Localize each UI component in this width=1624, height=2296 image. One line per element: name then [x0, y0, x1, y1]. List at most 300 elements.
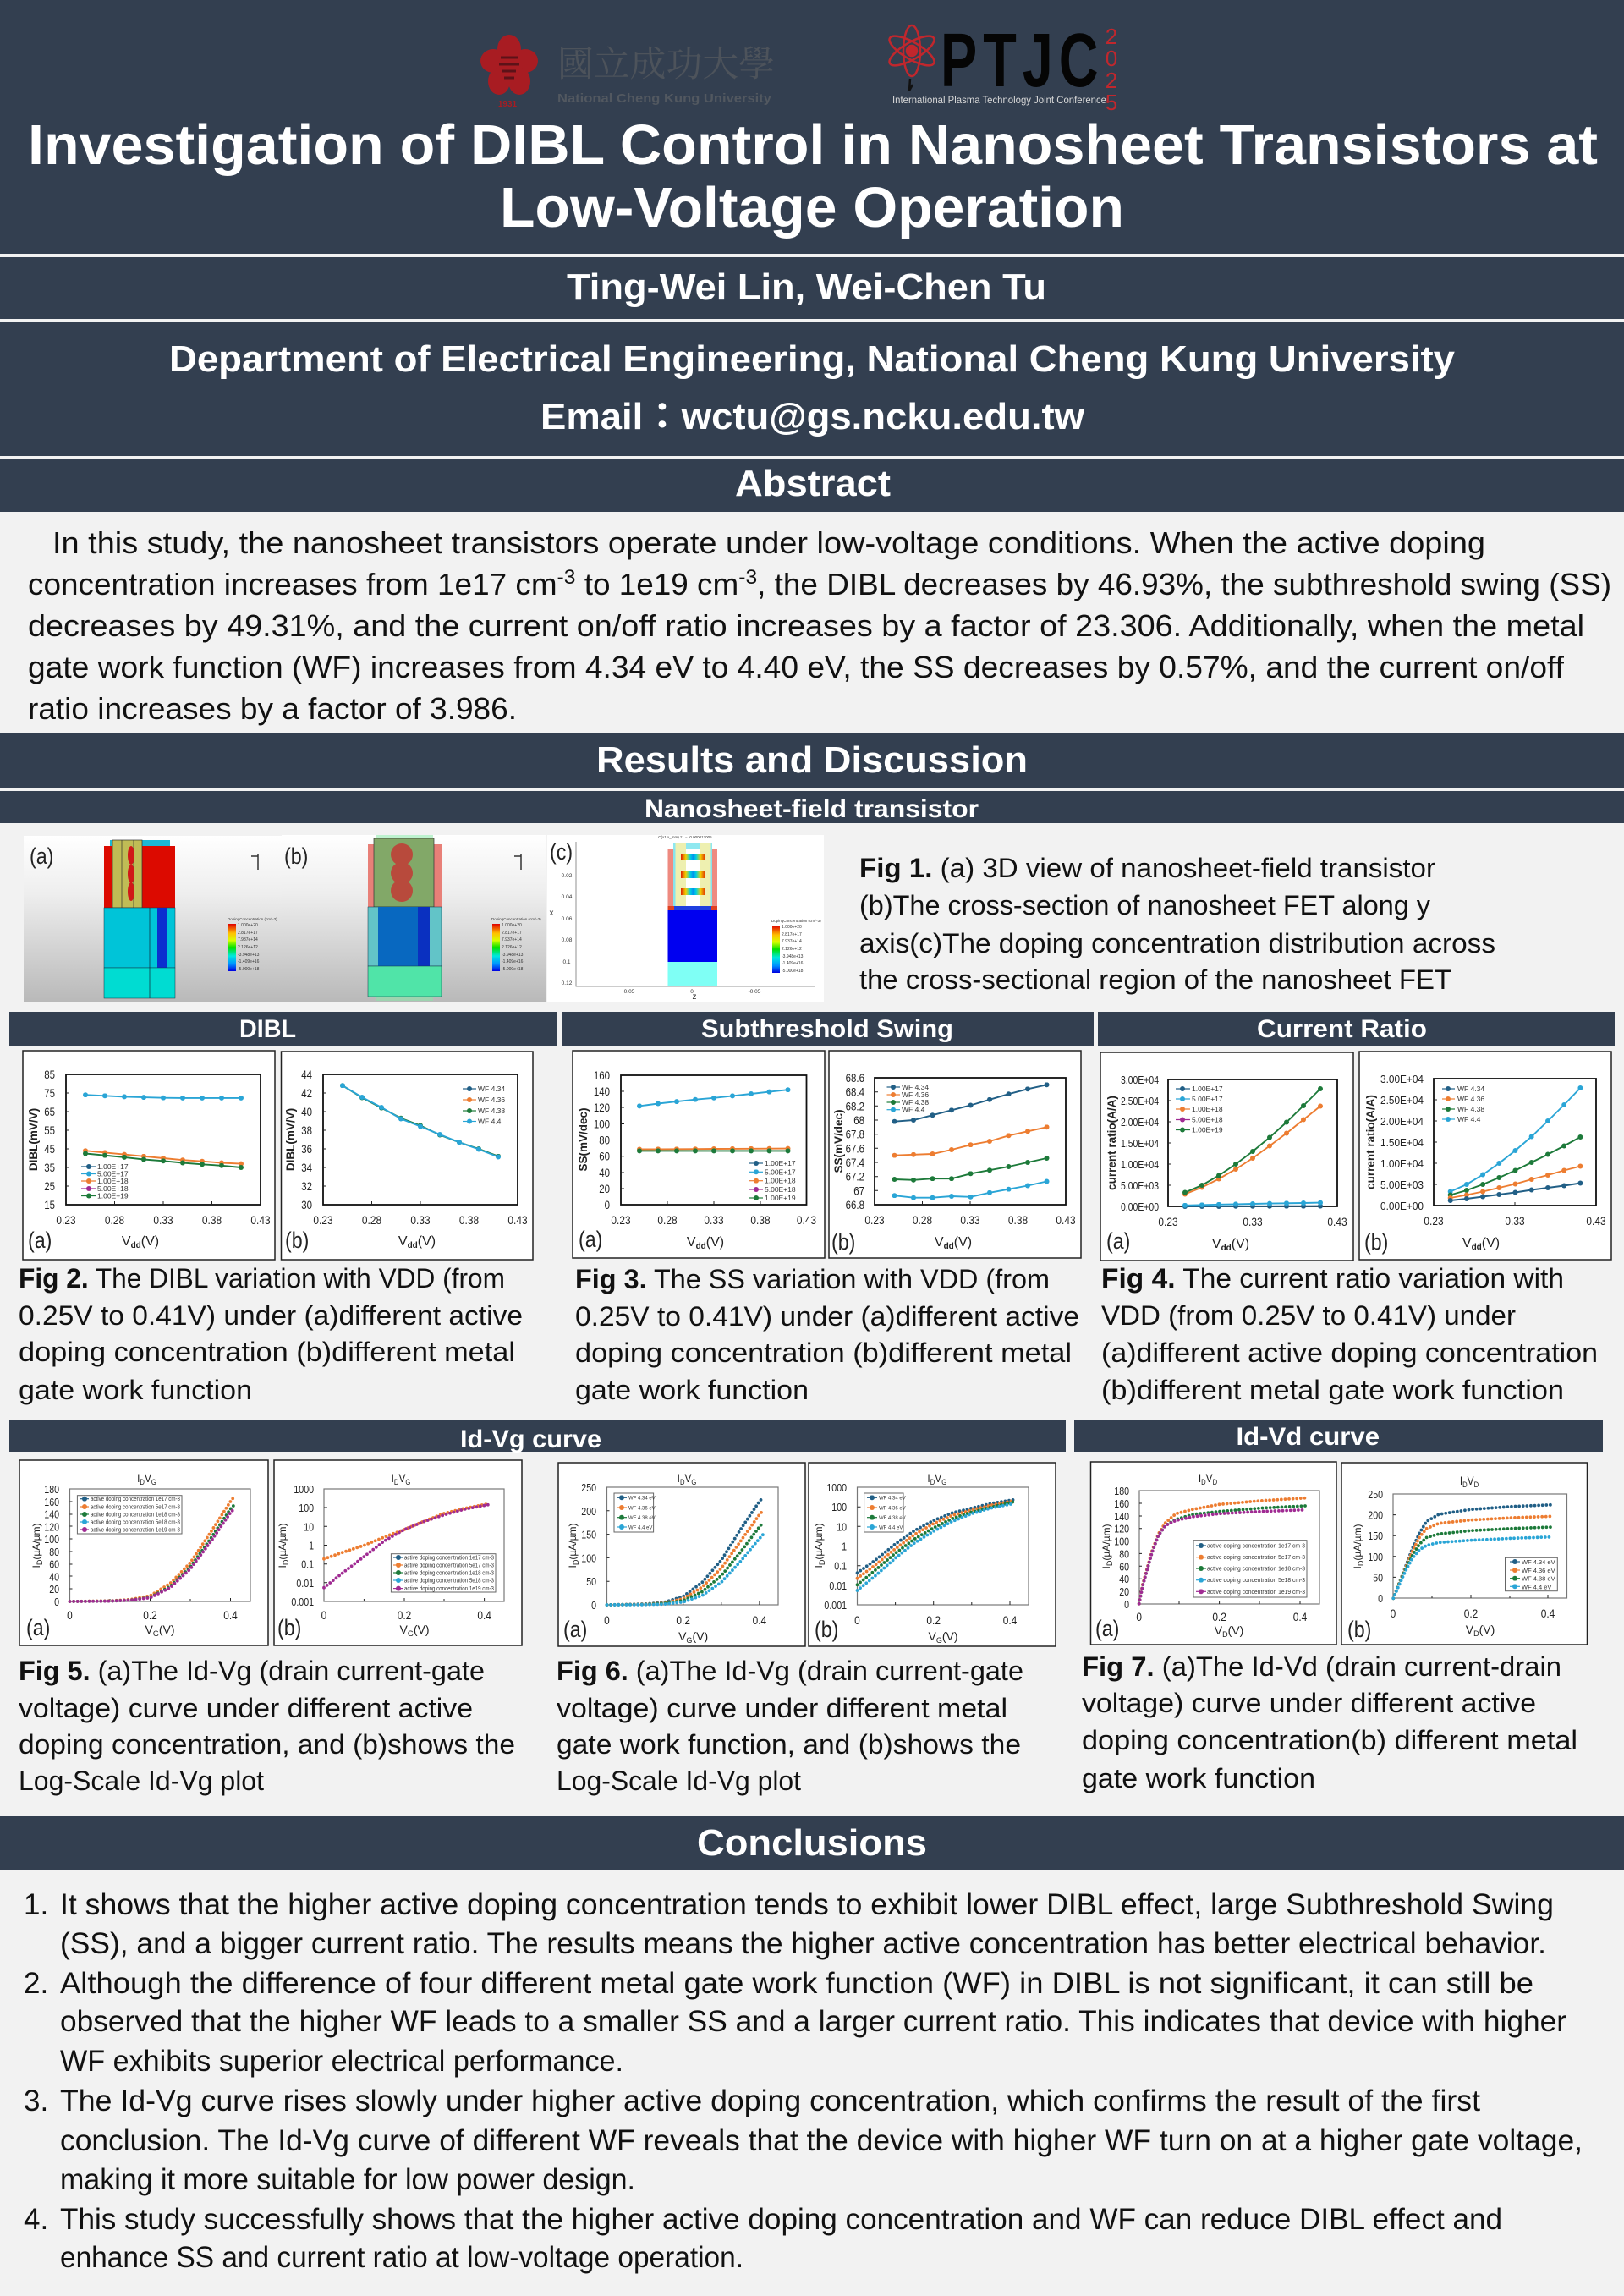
Fig 5 caption: Fig 5. (a)The Id-Vg (drain current-gate — [19, 1656, 485, 1686]
chart: Fig 7b Id-Vd, work function: (µA/µm) — [1352, 1524, 1363, 1561]
chart: Fig 7a Id-Vd, doping: (a) — [1095, 1616, 1119, 1641]
axis tick labels: 0.08 — [562, 937, 573, 943]
Fig 6 caption: Log-Scale Id-Vg plot — [557, 1766, 801, 1796]
chart: Fig 2b DIBL vs Vdd, work function: 36 — [301, 1142, 312, 1156]
chart: Fig 3a SS vs Vdd, doping: 100 — [594, 1117, 610, 1131]
chart: Fig 5a Id-Vg linear, doping: 0.2 — [143, 1608, 157, 1622]
chart: Fig 5b Id-Vg log, doping: G — [408, 1629, 414, 1638]
vertical year 2025: 5 — [1106, 90, 1117, 115]
chart: Fig 5a Id-Vg linear, doping: 60 — [49, 1558, 59, 1571]
results heading — [0, 733, 1624, 788]
Fig 4 caption — [1101, 1263, 1598, 1405]
chart: Fig 3b SS vs Vdd, work function: 67.2 — [846, 1170, 864, 1184]
axis tick labels: 0.1 — [562, 959, 571, 965]
chart: Fig 2b DIBL vs Vdd, work function: WF 4.4 — [478, 1117, 502, 1125]
chart: Fig 7a Id-Vd, doping: active doping concentration 1e17 cm-3 — [1207, 1541, 1305, 1550]
chart: Fig 7a Id-Vd, doping: V — [1206, 1471, 1213, 1485]
chart: Fig 3a SS vs Vdd, doping: 120 — [594, 1101, 610, 1114]
chart: Fig 7a Id-Vd, doping: active doping concentration 1e19 cm-3 — [1207, 1588, 1305, 1596]
chart: Fig 7b Id-Vd, work function: 100 — [1368, 1551, 1383, 1563]
chart: Fig 3b SS vs Vdd, work function: 0.38 — [1008, 1213, 1028, 1227]
vertical year 2025 — [1106, 24, 1117, 115]
chart: Fig 5b Id-Vg log, doping: 100 — [299, 1502, 314, 1514]
chart: Fig 4a current ratio vs Vdd, doping: 0.00E+00 — [1121, 1200, 1159, 1213]
chart: Fig 6b Id-Vg log, work function: 10 — [837, 1520, 847, 1534]
chart: Fig 5b Id-Vg log, doping: active doping concentration 1e18 cm-3 — [404, 1570, 494, 1576]
chart: Fig 3a SS vs Vdd, doping: 60 — [599, 1150, 610, 1163]
chart: Fig 7b Id-Vd, work function: D — [1474, 1480, 1479, 1489]
Current Ratio heading — [1098, 1012, 1615, 1046]
chart: Fig 5a Id-Vg linear, doping: G — [153, 1629, 159, 1638]
abstract text: concentration increases from 1e17 cm — [28, 567, 544, 601]
panel: device 3D view (a) — [24, 836, 282, 1002]
chart: Fig 3b SS vs Vdd, work function: 68.4 — [846, 1085, 864, 1099]
conclusion 4: This study successfully shows that the higher active doping concentration and WF can reduce DIBL effect and — [60, 2203, 1502, 2236]
chart: Fig 7a Id-Vd, doping: 0.2 — [1212, 1610, 1226, 1623]
chart: Fig 2a DIBL vs Vdd, doping: (a) — [28, 1228, 52, 1253]
authors band — [0, 257, 1624, 319]
chart: Fig 4b current ratio vs Vdd, work function: 5.00E+03 — [1380, 1178, 1424, 1191]
chart: Fig 7a Id-Vd, doping: 140 — [1114, 1510, 1129, 1523]
axis tick labels: 0 — [690, 989, 694, 995]
chart: Fig 5a Id-Vg linear, doping: V — [145, 1471, 151, 1485]
chart: Fig 6a Id-Vg linear, work function: (V) — [692, 1629, 708, 1643]
Fig 1 caption: Fig 1. (a) 3D view of nanosheet-field transistor — [859, 853, 1435, 883]
axis tick labels: C(x1/x_mm) z1 = -0.000017005 — [658, 835, 712, 839]
Fig 6 caption: voltage) curve under different metal — [557, 1693, 1007, 1723]
icon: red atom — [886, 25, 938, 76]
chart: Fig 3a SS vs Vdd, doping: 160 — [594, 1068, 610, 1082]
chart: Fig 7b Id-Vd, work function: I — [1460, 1474, 1462, 1487]
chart: Fig 2b DIBL vs Vdd, work function: 42 — [301, 1086, 312, 1100]
abstract text: ratio increases by a factor of 3.986. — [28, 691, 517, 726]
chart: Fig 2a DIBL vs Vdd, doping: 5.00E+17 — [97, 1169, 129, 1178]
chart: Fig 4b current ratio vs Vdd, work function: WF 4.4 — [1457, 1115, 1481, 1123]
chart: Fig 6b Id-Vg log, work function: 1000 — [826, 1481, 847, 1494]
abstract text: to 1e19 cm — [575, 567, 738, 601]
chart: Fig 6a Id-Vg linear, work function: 0 — [604, 1613, 610, 1627]
chart: Fig 2b DIBL vs Vdd, work function: 38 — [301, 1123, 312, 1137]
chart: Fig 2a DIBL vs Vdd, doping: 1.00E+17 — [97, 1162, 129, 1171]
panel: doping distribution (c) — [547, 835, 824, 1002]
chart: Fig 3b SS vs Vdd, work function: 67.6 — [846, 1141, 864, 1156]
chart: Fig 5b Id-Vg log, doping: 0.001 — [291, 1596, 314, 1608]
chart: Fig 4b current ratio vs Vdd, work function: 2.00E+04 — [1380, 1115, 1424, 1128]
chart: Fig 7a Id-Vd, doping: active doping concentration 5e18 cm-3 — [1207, 1576, 1305, 1584]
chart: Fig 2a DIBL vs Vdd, doping: 0.38 — [202, 1213, 222, 1227]
chart: Fig 3b SS vs Vdd, work function: 0.28 — [913, 1213, 932, 1227]
chart: Fig 7b Id-Vd, work function: WF 4.34 eV — [1522, 1558, 1555, 1566]
chart: Fig 2a DIBL vs Vdd, doping: 0.33 — [153, 1213, 173, 1227]
axis tick labels: 0.04 — [562, 894, 573, 900]
Fig 1 caption: axis(c)The doping concentration distribution across — [859, 928, 1495, 958]
chart: Fig 4a current ratio vs Vdd, doping: (a) — [1106, 1228, 1130, 1254]
chart: Fig 3a SS vs Vdd, doping: 1.00E+18 — [765, 1177, 796, 1185]
colorbar labels: 7.937e+14 — [238, 937, 258, 942]
Fig 2 caption — [19, 1263, 523, 1405]
chart: Fig 5a Id-Vg linear, doping: I — [30, 1565, 42, 1568]
conclusion 4: enhance SS and current ratio at low-voltage operation. — [60, 2241, 743, 2274]
Fig 5 caption: Log-Scale Id-Vg plot — [19, 1766, 264, 1796]
chart: Fig 5b Id-Vg log, doping: (µA/µm) — [277, 1523, 288, 1560]
panel: device cross-section (b) — [282, 835, 546, 1002]
chart: Fig 7a Id-Vd, doping: D — [1213, 1477, 1217, 1486]
PTJC wordmark: PTJC — [941, 18, 1105, 103]
colorbar labels: DopingConcentration (cm^-3) — [491, 917, 541, 921]
chart: Fig 2a DIBL vs Vdd, doping: 0.23 — [56, 1213, 76, 1227]
chart: Fig 4b current ratio vs Vdd, work function: WF 4.36 — [1457, 1095, 1484, 1103]
chart: Fig 5a Id-Vg linear, doping: 140 — [44, 1508, 59, 1521]
chart: Fig 5b Id-Vg log, doping: 0.01 — [296, 1577, 314, 1590]
colorbar labels — [771, 919, 821, 974]
chart: Fig 3a SS vs Vdd, doping: SS(mV/dec) — [577, 1107, 590, 1172]
chart: Fig 7a Id-Vd, doping: (µA/µm) — [1100, 1524, 1112, 1561]
chart: Fig 6b Id-Vg log, work function: D — [930, 1477, 935, 1486]
chart: Fig 5a Id-Vg linear, doping: (µA/µm) — [30, 1523, 42, 1560]
chart: Fig 6a Id-Vg linear, work function: G — [686, 1636, 692, 1645]
conclusion 1 — [24, 1888, 1554, 1960]
chart: Fig 6a Id-Vg linear, work function: WF 4.4 eV — [628, 1525, 652, 1530]
chart: Fig 3a SS vs Vdd, doping: (a) — [579, 1227, 602, 1252]
chart: Fig 7b Id-Vd, work function: V — [1466, 1623, 1473, 1636]
chart: Fig 5b Id-Vg log, doping: 0.2 — [398, 1608, 411, 1622]
Fig 4 caption: VDD (from 0.25V to 0.41V) under — [1101, 1300, 1516, 1331]
chart: Fig 3b SS vs Vdd, work function: 67.4 — [846, 1156, 864, 1169]
chart: Fig 3a SS vs Vdd, doping: 0.38 — [750, 1213, 771, 1227]
colorbar labels: -3.948e+13 — [502, 953, 524, 958]
chart: Fig 4a current ratio vs Vdd, doping: 5.00E+18 — [1192, 1115, 1223, 1123]
chart: Fig 7a Id-Vd, doping: 100 — [1114, 1535, 1129, 1548]
chart: Fig 6b Id-Vg log, work function: 0 — [854, 1613, 860, 1627]
chart: Fig 4a current ratio vs Vdd, doping: 1.00E+19 — [1192, 1125, 1223, 1134]
chart: Fig 6a Id-Vg linear, work function: 0.4 — [753, 1613, 766, 1627]
chart: Fig 6a Id-Vg linear, work function: (a) — [563, 1617, 587, 1642]
chart: Fig 4b current ratio vs Vdd, work function: V — [1462, 1236, 1472, 1250]
chart: Fig 4b current ratio vs Vdd, work function: 1.50E+04 — [1380, 1136, 1424, 1149]
chart: Fig 3b SS vs Vdd, work function: 0.33 — [960, 1213, 980, 1227]
conclusion 2: WF exhibits superior electrical performance. — [60, 2045, 623, 2078]
chart: Fig 3b SS vs Vdd, work function: WF 4.38 — [902, 1098, 929, 1107]
chart: Fig 6b Id-Vg log, work function: 0.001 — [824, 1599, 847, 1612]
emblem year: 1931 — [498, 100, 518, 109]
chart: Fig 3a SS vs Vdd, doping: 0.43 — [797, 1213, 816, 1227]
chart: Fig 7a Id-Vd, doping: D — [1106, 1560, 1114, 1566]
chart: Fig 5a Id-Vg linear, doping: 180 — [44, 1483, 59, 1496]
chart: Fig 7a Id-Vd, doping: I — [1199, 1471, 1201, 1485]
chart: Fig 2a DIBL vs Vdd, doping: (V) — [141, 1234, 159, 1249]
colorbar labels: -5.000e+18 — [502, 967, 524, 972]
chart: Fig 7a Id-Vd, doping: active doping concentration 1e18 cm-3 — [1207, 1565, 1305, 1572]
Fig 6 caption — [557, 1656, 1023, 1796]
chart: Fig 6b Id-Vg log, work function: (µA/µm) — [813, 1523, 825, 1560]
chart: Fig 5a Id-Vg linear, doping: 80 — [49, 1546, 59, 1558]
Fig 2 caption: doping concentration (b)different metal — [19, 1337, 515, 1367]
chart: Fig 3b SS vs Vdd, work function: 68.2 — [846, 1099, 864, 1113]
chart: Fig 7a Id-Vd, doping: 60 — [1119, 1560, 1129, 1574]
axis triad — [251, 854, 258, 870]
vertical year 2025: 2 — [1106, 68, 1117, 93]
chart: Fig 5a Id-Vg linear, doping: 0.4 — [223, 1608, 238, 1622]
Current Ratio heading: Current Ratio — [1257, 1015, 1427, 1043]
logo: PTJC 2025 — [886, 18, 1117, 115]
conclusion 2: observed that the higher WF leads to a smaller SS and a larger current ratio. This indicates that device with higher — [60, 2005, 1566, 2038]
colorbar — [492, 924, 500, 971]
chart: Fig 5a Id-Vg linear, doping: V — [145, 1623, 153, 1636]
abstract heading: Abstract — [735, 463, 891, 504]
chart: Fig 4b current ratio vs Vdd, work function: (b) — [1364, 1229, 1388, 1255]
Fig 3 caption — [575, 1264, 1079, 1405]
chart: Fig 7b Id-Vd, work function: (b) — [1347, 1617, 1371, 1642]
abstract text: gate work function (WF) increases from 4.34 eV to 4.40 eV, the SS decreases by 0.57%, and the current on/off — [28, 650, 1565, 684]
Fig 3 caption: 0.25V to 0.41V) under (a)different active — [575, 1301, 1079, 1332]
vertical year 2025: 2 — [1106, 24, 1117, 49]
chart: Fig 7b Id-Vd, work function: 0 — [1391, 1607, 1396, 1620]
conclusion 4: 4. — [24, 2203, 48, 2236]
chart: Fig 3a SS vs Vdd, doping: (V) — [706, 1235, 724, 1250]
chart: Fig 7a Id-Vd, doping: (V) — [1228, 1623, 1243, 1637]
chart: Fig 7a Id-Vd, doping: 80 — [1119, 1547, 1129, 1561]
header band — [0, 0, 1624, 254]
axis tick labels: -0.05 — [749, 989, 761, 995]
chart: Fig 3b SS vs Vdd, work function: WF 4.34 — [902, 1083, 929, 1091]
chart: Fig 6b Id-Vg log, work function: WF 4.34 eV — [879, 1497, 906, 1502]
Fig 6 caption: Fig 6. (a)The Id-Vg (drain current-gate — [557, 1656, 1023, 1686]
label (c): (c) — [550, 839, 573, 865]
chart: Fig 7b Id-Vd, work function: 0.2 — [1464, 1607, 1478, 1620]
chart: Fig 6a Id-Vg linear, work function: 200 — [581, 1505, 596, 1518]
chart: Fig 4a current ratio vs Vdd, doping: V — [1212, 1237, 1221, 1251]
chart: Fig 2b DIBL vs Vdd, work function: 0.33 — [410, 1213, 431, 1227]
chart: Fig 5b Id-Vg log, doping: active doping concentration 5e17 cm-3 — [404, 1563, 494, 1568]
chart: Fig 2a DIBL vs Vdd, doping: 25 — [44, 1179, 55, 1193]
chart: Fig 3a SS vs Vdd, doping: 20 — [599, 1182, 610, 1195]
conclusion 2 — [24, 1967, 1566, 2078]
chart: Fig 3a SS vs Vdd, doping: 1.00E+17 — [765, 1159, 796, 1167]
chart: Fig 3b SS vs Vdd, work function: 68.6 — [846, 1071, 864, 1085]
chart: Fig 5b Id-Vg log, doping: G — [405, 1477, 410, 1486]
chart: Fig 2a DIBL vs Vdd, doping: 1.00E+19 — [97, 1191, 129, 1200]
label (b): (b) — [284, 843, 308, 869]
chart: Fig 2a DIBL vs Vdd, doping: 85 — [44, 1068, 55, 1081]
abstract text — [28, 525, 1611, 726]
chart: Fig 5a Id-Vg linear, doping: active doping concentration 5e18 cm-3 — [91, 1519, 180, 1525]
chart: Fig 7b Id-Vd, work function: 0 — [1378, 1592, 1383, 1605]
chart: Fig 3a SS vs Vdd, doping: 140 — [594, 1085, 610, 1098]
chart: Fig 4a current ratio vs Vdd, doping: 3.00E+04 — [1121, 1074, 1159, 1086]
chart: Fig 5b Id-Vg log, doping: 0.4 — [477, 1608, 491, 1622]
chart: Fig 7a Id-Vd, doping: active doping concentration 5e17 cm-3 — [1207, 1553, 1305, 1561]
chart: Fig 5b Id-Vg log, doping: 1000 — [294, 1483, 314, 1496]
university name in English: National Cheng Kung University — [557, 91, 772, 106]
chart: Fig 5b Id-Vg log, doping: active doping concentration 5e18 cm-3 — [404, 1578, 494, 1584]
university name in Chinese: 國立成功大學 — [557, 46, 775, 85]
Fig 5 caption — [19, 1656, 515, 1796]
chart: Fig 4b current ratio vs Vdd, work function: dd — [1472, 1243, 1482, 1252]
chart: Fig 7b Id-Vd, work function: (V) — [1479, 1623, 1495, 1636]
chart: Fig 2b DIBL vs Vdd, work function: (b) — [285, 1228, 309, 1253]
conclusion 3: conclusion. The Id-Vg curve of different WF reveals that the device with higher WF turn on at a higher gate voltage, — [60, 2124, 1583, 2157]
chart: Fig 5b Id-Vg log, doping: 0 — [321, 1608, 326, 1622]
Fig 3 caption: Fig 3. The SS variation with VDD (from — [575, 1264, 1050, 1294]
chart: Fig 7a Id-Vd, doping: 40 — [1119, 1573, 1129, 1585]
colorbar labels: -3.948e+13 — [238, 953, 260, 958]
conclusion 3 — [24, 2085, 1583, 2196]
chart: Fig 4a current ratio vs Vdd, doping: 5.00E+03 — [1121, 1179, 1159, 1192]
label (a): (a) — [30, 843, 53, 869]
chart: Fig 2a DIBL vs Vdd, doping: V — [122, 1234, 131, 1249]
chart: Fig 6b Id-Vg log, work function: 0.4 — [1003, 1613, 1017, 1627]
chart: Fig 3b SS vs Vdd, work function — [829, 1051, 1081, 1258]
nanosheet heading — [0, 791, 1624, 823]
axis tick labels: 0.12 — [562, 980, 573, 986]
chart: Fig 3b SS vs Vdd, work function: (V) — [954, 1235, 972, 1250]
chart: Fig 2b DIBL vs Vdd, work function: 30 — [301, 1198, 312, 1211]
chart: Fig 2b DIBL vs Vdd, work function: 34 — [301, 1161, 312, 1174]
chart: Fig 7b Id-Vd, work function: WF 4.36 eV — [1522, 1567, 1555, 1574]
chart: Fig 3a SS vs Vdd, doping — [573, 1051, 825, 1258]
conclusion 3: 3. — [24, 2085, 48, 2117]
chart: Fig 2a DIBL vs Vdd, doping — [23, 1051, 275, 1260]
vertical year 2025: 0 — [1106, 46, 1117, 71]
chart: Fig 5b Id-Vg log, doping: I — [277, 1565, 288, 1568]
chart: Fig 5b Id-Vg log, doping: V — [398, 1471, 406, 1485]
chart: Fig 7a Id-Vd, doping: I — [1100, 1566, 1112, 1568]
Fig 7 caption: voltage) curve under different active — [1082, 1688, 1536, 1718]
chart: Fig 5b Id-Vg log, doping: V — [399, 1623, 408, 1636]
chart: Fig 4a current ratio vs Vdd, doping: dd — [1221, 1244, 1232, 1253]
colorbar labels: 7.937e+14 — [502, 937, 522, 942]
chart: Fig 7a Id-Vd, doping: 0 — [1124, 1598, 1129, 1611]
chart: Fig 5b Id-Vg log, doping: I — [392, 1471, 394, 1485]
Fig 1 caption: (b)The cross-section of nanosheet FET along y — [859, 890, 1430, 920]
chart: Fig 5b Id-Vg log, doping: D — [394, 1477, 398, 1486]
Fig 7 caption: gate work function — [1082, 1763, 1315, 1793]
chart: Fig 2a DIBL vs Vdd, doping: 1.00E+18 — [97, 1177, 129, 1185]
icon: NCKU red flower emblem — [480, 35, 538, 95]
chart: Fig 3b SS vs Vdd, work function: V — [935, 1235, 944, 1250]
Id-Vg heading — [9, 1420, 1066, 1453]
Fig 7 caption: doping concentration(b) different metal — [1082, 1725, 1577, 1755]
colorbar labels — [228, 917, 277, 972]
chart: Fig 5a Id-Vg linear, doping: 40 — [49, 1570, 59, 1584]
chart: Fig 2b DIBL vs Vdd, work function: WF 4.38 — [478, 1107, 505, 1115]
chart: Fig 3a SS vs Vdd, doping: 0 — [605, 1198, 610, 1211]
chart: Fig 7a Id-Vd, doping: 0 — [1136, 1610, 1142, 1623]
colorbar labels: -1.409e+16 — [238, 959, 260, 964]
chart: Fig 2a DIBL vs Vdd, doping: 55 — [44, 1123, 55, 1137]
chart: Fig 3b SS vs Vdd, work function: (b) — [831, 1229, 855, 1255]
chart: Fig 6b Id-Vg log, work function: 100 — [831, 1501, 847, 1513]
conclusion 4 — [24, 2203, 1502, 2274]
axis tick labels: 0.05 — [624, 989, 635, 995]
Fig 3 caption: doping concentration (b)different metal — [575, 1338, 1072, 1368]
chart: Fig 2a DIBL vs Vdd, doping: 15 — [44, 1198, 55, 1211]
chart: Fig 7a Id-Vd, doping: 160 — [1114, 1497, 1129, 1510]
chart: Fig 6a Id-Vg linear, work function: WF 4.34 eV — [628, 1497, 656, 1502]
chart: Fig 3b SS vs Vdd, work function: 68 — [853, 1113, 864, 1127]
colorbar labels: 1.000e+20 — [782, 925, 802, 930]
Fig 4 caption: (b)different metal gate work function — [1101, 1375, 1564, 1405]
chart: Fig 2b DIBL vs Vdd, work function: 32 — [301, 1179, 312, 1193]
chart: Fig 6b Id-Vg log, work function: WF 4.38 eV — [879, 1516, 906, 1521]
axis tick labels: z — [692, 992, 697, 1002]
chart: Fig 5a Id-Vg linear, doping: (V) — [159, 1623, 175, 1636]
chart: Fig 4b current ratio vs Vdd, work function: 1.00E+04 — [1380, 1157, 1424, 1170]
abstract text: , the DIBL decreases by 46.93%, the subthreshold swing (SS) — [757, 567, 1611, 601]
chart: Fig 2b DIBL vs Vdd, work function: V — [398, 1234, 408, 1249]
Fig 7 caption — [1082, 1651, 1577, 1793]
chart: Fig 4a current ratio vs Vdd, doping: 5.00E+17 — [1192, 1095, 1223, 1103]
chart: Fig 2b DIBL vs Vdd, work function: dd — [408, 1241, 418, 1250]
chart: Fig 2b DIBL vs Vdd, work function: 0.38 — [459, 1213, 479, 1227]
Fig 3 caption: gate work function — [575, 1375, 809, 1405]
chart: Fig 5a Id-Vg linear, doping: 0 — [54, 1596, 59, 1608]
chart: Fig 7b Id-Vd, work function: I — [1352, 1566, 1363, 1568]
atom tail — [909, 79, 913, 91]
colorbar labels: 2.126e+12 — [502, 945, 522, 950]
chart: Fig 2b DIBL vs Vdd, work function: 0.23 — [313, 1213, 333, 1227]
chart: Fig 6b Id-Vg log, work function: 1 — [842, 1540, 847, 1553]
chart: Fig 5b Id-Vg log, doping: 1 — [309, 1539, 314, 1552]
chart: Fig 3a SS vs Vdd, doping: 5.00E+17 — [765, 1167, 796, 1176]
chart: Fig 6a Id-Vg linear, work function: 150 — [581, 1529, 596, 1541]
chart: Fig 3a SS vs Vdd, doping: 0.23 — [611, 1213, 631, 1227]
Fig 4 caption: Fig 4. The current ratio variation with — [1101, 1263, 1564, 1294]
chart: Fig 6b Id-Vg log, work function: G — [941, 1477, 946, 1486]
conclusion 3: making it more suitable for low power design. — [60, 2163, 635, 2196]
colorbar labels: 1.000e+20 — [238, 923, 258, 928]
conclusions heading: Conclusions — [697, 1822, 927, 1864]
chart: Fig 6b Id-Vg log, work function: (V) — [942, 1629, 958, 1643]
chart: Fig 3b SS vs Vdd, work function: 0.43 — [1056, 1213, 1076, 1227]
chart: Fig 3a SS vs Vdd, doping: 80 — [599, 1133, 610, 1147]
chart: Fig 7b Id-Vd, work function: D — [1462, 1480, 1468, 1489]
Id-Vg heading: Id-Vg curve — [460, 1425, 601, 1453]
abstract text: -3 — [738, 566, 757, 589]
abstract text: -3 — [557, 566, 575, 589]
conclusions list — [24, 1888, 1583, 2274]
chart: Fig 2b DIBL vs Vdd, work function: 40 — [301, 1105, 312, 1118]
chart: Fig 5a Id-Vg linear, doping: G — [151, 1477, 156, 1486]
DIBL heading: DIBL — [239, 1015, 296, 1043]
colorbar — [772, 926, 780, 973]
chart: Fig 6a Id-Vg linear, work function: I — [567, 1565, 579, 1568]
axis tick labels — [550, 835, 761, 1002]
chart: Fig 7b Id-Vd, work function: D — [1473, 1629, 1479, 1638]
chart: Fig 6b Id-Vg log, work function: I — [813, 1565, 825, 1568]
chart: Fig 3b SS vs Vdd, work function: 66.8 — [846, 1198, 864, 1211]
chart: Fig 7b Id-Vd, work function: 50 — [1373, 1571, 1383, 1585]
chart: Fig 2a DIBL vs Vdd, doping: 45 — [44, 1142, 55, 1156]
chart: Fig 3b SS vs Vdd, work function: dd — [944, 1242, 954, 1251]
chart: Fig 6a Id-Vg linear, work function: 0 — [591, 1599, 596, 1612]
chart: Fig 4a current ratio vs Vdd, doping: (V) — [1232, 1237, 1249, 1251]
chart: Fig 4b current ratio vs Vdd, work function: 0.33 — [1505, 1214, 1525, 1228]
chart: Fig 3b SS vs Vdd, work function: 67.8 — [846, 1128, 864, 1141]
chart: Fig 4a current ratio vs Vdd, doping: 1.00E+17 — [1192, 1085, 1223, 1093]
chart: Fig 7a Id-Vd, doping: 120 — [1114, 1523, 1129, 1535]
conclusion 2: Although the difference of four different metal gate work function (WF) in DIBL is not significant, it can still be — [60, 1967, 1533, 2000]
colorbar labels: -1.409e+16 — [502, 959, 524, 964]
colorbar labels: DopingConcentration (cm^-3) — [771, 919, 821, 923]
chart: Fig 3a SS vs Vdd, doping: 1.00E+19 — [765, 1194, 796, 1202]
title: Low-Voltage Operation — [500, 176, 1124, 239]
chart: Fig 7b Id-Vd, work function: WF 4.4 eV — [1522, 1583, 1551, 1590]
chart: Fig 7b Id-Vd, work function: 250 — [1368, 1488, 1383, 1501]
chart: Fig 7b Id-Vd, work function: V — [1468, 1474, 1474, 1487]
chart: Fig 2a DIBL vs Vdd, doping: DIBL(mV/V) — [27, 1108, 40, 1171]
chart: Fig 4a current ratio vs Vdd, doping: 0.23 — [1158, 1215, 1178, 1228]
